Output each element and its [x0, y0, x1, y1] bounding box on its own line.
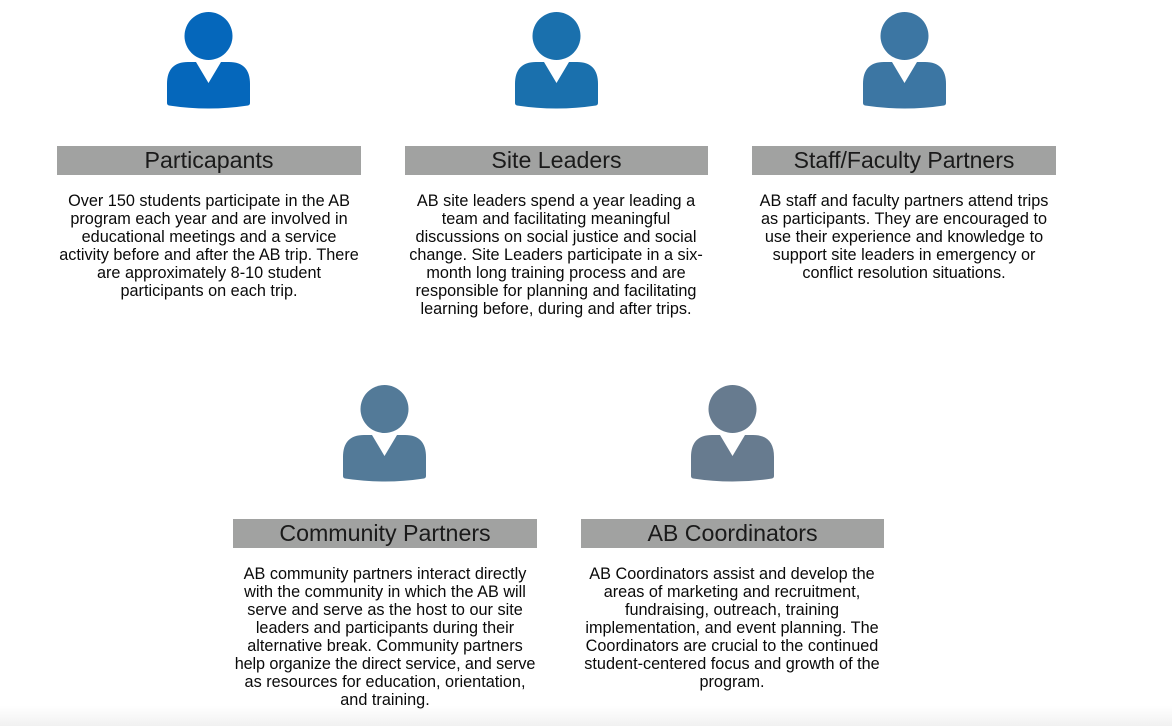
text: site leaders description: change. Site Leaders participate in a six-: [409, 246, 703, 264]
icon: community partner person: [343, 385, 426, 482]
panel: Community Partners: [233, 385, 537, 709]
text: site leaders description: learning before, during and after trips.: [420, 300, 692, 318]
text: community partners description: help organize the direct service, and serve: [235, 655, 535, 673]
heading: Community Partners: Community Partners: [279, 520, 491, 546]
text: participants description: are approximately 8-10 student: [97, 264, 321, 282]
text: staff and faculty description: AB staff and faculty partners attend trips: [760, 192, 1048, 210]
text: coordinators description: AB Coordinators assist and develop the: [589, 565, 875, 583]
text: coordinators description: fundraising, outreach, training: [625, 601, 839, 619]
text: site leaders description: [409, 192, 703, 318]
text: community partners description: [235, 565, 535, 709]
text: participants description: activity before and after the AB trip. There: [59, 246, 359, 264]
text: community partners description: alternative break. Community partners: [247, 637, 523, 655]
icon: coordinator person: [691, 385, 774, 482]
text: staff and faculty description: conflict resolution situations.: [802, 264, 1006, 282]
text: coordinators description: student-centered focus and growth of the: [584, 655, 880, 673]
text: coordinators description: program.: [699, 673, 765, 691]
text: site leaders description: AB site leaders spend a year leading a: [417, 192, 695, 210]
heading: Site Leaders: [405, 146, 708, 175]
text: participants description: [59, 192, 359, 300]
heading: Staff/Faculty Partners: [752, 146, 1056, 175]
text: participants description: Over 150 students participate in the AB: [68, 192, 350, 210]
panel: Participants: [57, 12, 361, 300]
text: coordinators description: implementation, and event planning. The: [585, 619, 879, 637]
text: site leaders description: responsible for planning and facilitating: [416, 282, 696, 300]
panel: AB Coordinators: [581, 385, 884, 691]
text: community partners description: leaders and participants during their: [256, 619, 514, 637]
text: site leaders description: team and facilitating meaningful: [442, 210, 670, 228]
text: staff and faculty description: support site leaders in emergency or: [773, 246, 1035, 264]
text: participants description: educational meetings and a service: [82, 228, 336, 246]
text: coordinators description: [584, 565, 880, 691]
text: community partners description: with the community in which the AB will: [244, 583, 526, 601]
text: community partners description: as resources for education, orientation,: [245, 673, 525, 691]
heading: Staff/Faculty Partners: Staff/Faculty Partners: [794, 147, 1014, 173]
text: staff and faculty description: use their experience and knowledge to: [765, 228, 1043, 246]
text: participants description: participants on each trip.: [120, 282, 298, 300]
text: coordinators description: areas of marketing and recruitment,: [604, 583, 860, 601]
panel: Site Leaders: [405, 12, 708, 318]
icon: staff person: [863, 12, 946, 108]
heading: Particapants: [57, 146, 361, 175]
text: site leaders description: discussions on social justice and social: [416, 228, 696, 246]
text: site leaders description: month long training process and are: [426, 264, 686, 282]
heading: AB Coordinators: AB Coordinators: [647, 520, 818, 546]
text: staff and faculty description: as participants. They are encouraged to: [761, 210, 1047, 228]
panel: Staff/Faculty Partners: [752, 12, 1056, 282]
heading: Community Partners: [233, 519, 537, 548]
heading: Particapants: Particapants: [145, 147, 273, 173]
text: community partners description: serve and serve as the host to our site: [247, 601, 523, 619]
icon: participant person: [167, 12, 250, 108]
icon: site leader person: [515, 12, 598, 108]
heading: Site Leaders: Site Leaders: [491, 147, 622, 173]
text: staff and faculty description: [760, 192, 1048, 282]
text: community partners description: and training.: [340, 691, 430, 709]
heading: AB Coordinators: [581, 519, 884, 548]
text: participants description: program each year and are involved in: [70, 210, 348, 228]
text: coordinators description: Coordinators are crucial to the continued: [586, 637, 878, 655]
text: community partners description: AB community partners interact directly: [244, 565, 526, 583]
